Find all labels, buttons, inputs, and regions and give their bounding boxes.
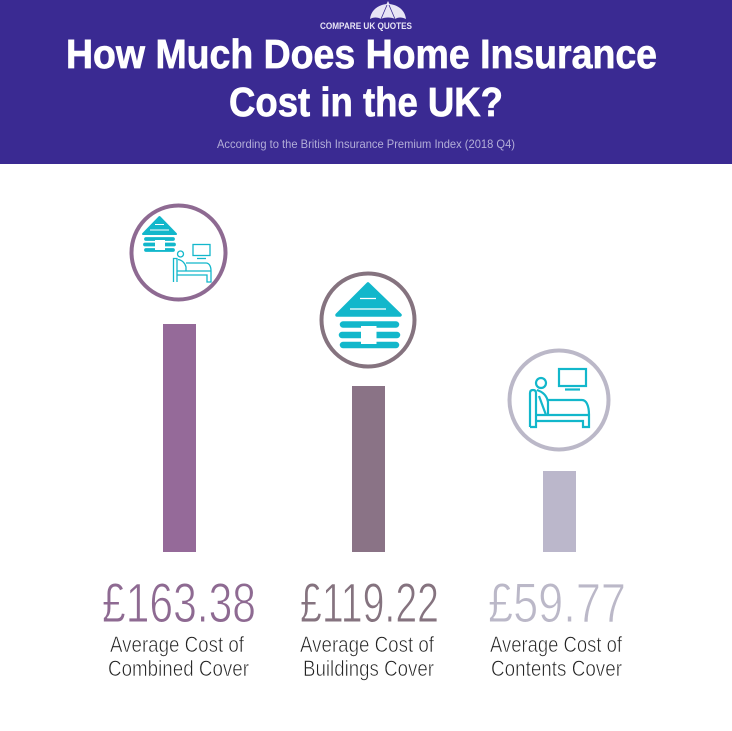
title: Cost in the UK? <box>229 79 503 125</box>
label: contents cover: Average Cost of <box>490 632 623 657</box>
bar: contents <box>543 471 576 552</box>
title: How Much Does Home Insurance <box>66 31 657 77</box>
label: contents cover <box>490 632 623 681</box>
label: combined cover: Average Cost of <box>110 632 245 657</box>
label: combined cover: Combined Cover <box>108 656 249 681</box>
label: combined cover <box>108 632 249 681</box>
label: buildings cover <box>300 632 435 681</box>
column: combined cover <box>102 206 256 681</box>
column: buildings cover <box>300 274 439 681</box>
title <box>66 31 657 125</box>
bar: buildings <box>352 386 385 552</box>
icon: bed and TV in circle <box>510 350 608 450</box>
bar: combined <box>163 324 196 552</box>
value: £119.22: £119.22 <box>300 571 439 634</box>
header band <box>0 0 732 164</box>
icon: house in circle <box>322 274 414 366</box>
logo: Compare UK Quotes: COMPARE UK QUOTES <box>320 21 412 31</box>
value: £59.77: £59.77 <box>488 571 626 634</box>
label: contents cover: Contents Cover <box>491 656 622 681</box>
subtitle: According to the British Insurance Premium Index (2018 Q4) <box>217 137 515 151</box>
label: buildings cover: Buildings Cover <box>303 656 434 681</box>
column: contents cover <box>488 350 626 681</box>
value: £163.38: £163.38 <box>102 571 256 634</box>
logo: Compare UK Quotes <box>320 1 412 31</box>
label: buildings cover: Average Cost of <box>300 632 435 657</box>
icon: house and bed in circle <box>132 206 226 300</box>
